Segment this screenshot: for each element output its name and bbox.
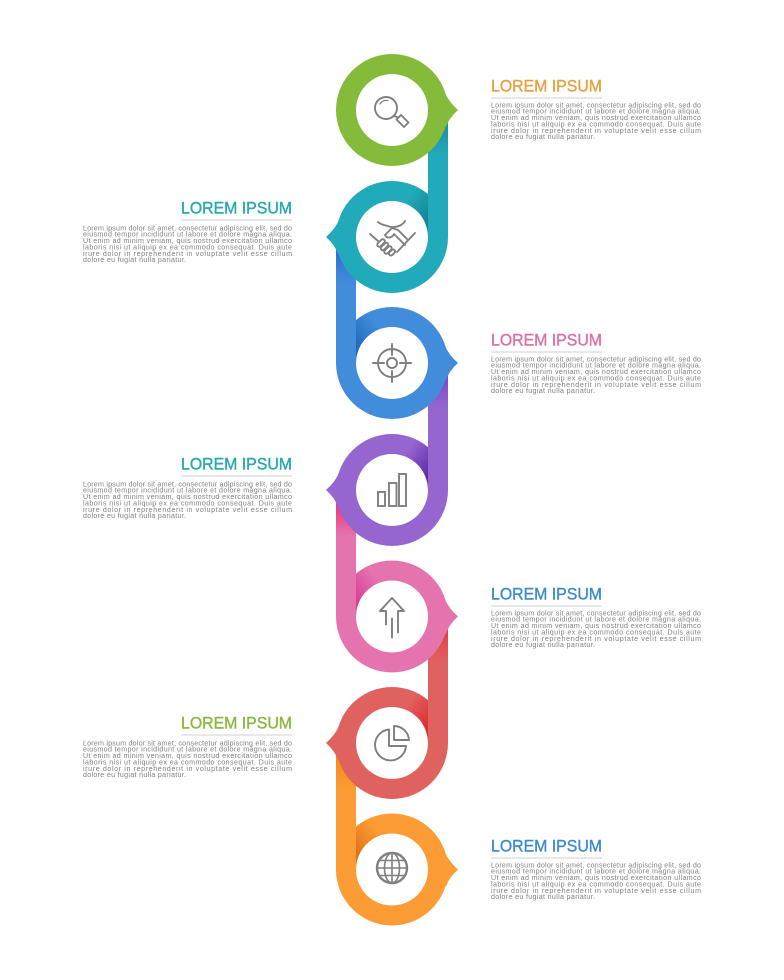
body text: eiusmod tempor incididunt ut labore et dolore magna aliqua.: [491, 616, 701, 624]
icon: magnifier: [375, 97, 408, 127]
orange ring shading: [356, 814, 388, 870]
body text: dolore eu fugiat nulla pariatur.: [83, 512, 186, 520]
body text: irure dolor in reprehenderit in voluptate velit esse cillum: [491, 887, 701, 895]
step 3: blue ring with target: [336, 245, 458, 419]
body text: laboris nisi ut aliquip ex ea commodo consequat. Duis aute: [491, 374, 701, 382]
body text: laboris nisi ut aliquip ex ea commodo consequat. Duis aute: [491, 628, 701, 636]
orange ring: [336, 814, 448, 926]
heading: LOREM IPSUM: [181, 198, 292, 217]
body text: Ut enim ad minim veniam, quis nostrud exercitation ullamco: [83, 237, 292, 245]
purple pointer: [326, 473, 347, 507]
body text: laboris nisi ut aliquip ex ea commodo consequat. Duis aute: [83, 499, 292, 507]
purple ring shading: [396, 434, 428, 490]
body text: Lorem ipsum dolor sit amet, consectetur adipiscing elit, sed do: [491, 355, 701, 363]
purple ring: [336, 434, 448, 546]
body text: irure dolor in reprehenderit in voluptate velit esse cillum: [83, 765, 292, 773]
body text: [83, 739, 292, 779]
text block: step 6: [83, 713, 292, 779]
step 6: red ring with pie chart: [326, 625, 448, 799]
text block: step 3: [491, 330, 701, 395]
step 4: purple ring with bar icon: [326, 372, 448, 546]
blue pointer: [437, 346, 458, 380]
body text: dolore eu fugiat nulla pariatur.: [83, 256, 186, 264]
icon: target: [373, 344, 411, 382]
body text: [83, 224, 292, 264]
body text: Lorem ipsum dolor sit amet, consectetur adipiscing elit, sed do: [83, 480, 292, 488]
teal connector: [428, 119, 448, 237]
heading: LOREM IPSUM: [181, 713, 292, 732]
body text: Ut enim ad minim veniam, quis nostrud exercitation ullamco: [491, 622, 701, 630]
teal ring: [336, 181, 448, 293]
blue ring shading: [356, 307, 388, 363]
step 2: teal ring with handshake: [326, 119, 448, 293]
pink pointer: [437, 600, 458, 634]
body text: [491, 101, 701, 141]
body text: eiusmod tempor incididunt ut labore et dolore magna aliqua.: [83, 487, 292, 495]
blue ring: [336, 307, 448, 419]
icon: up arrow: [380, 598, 404, 638]
body text: [491, 355, 701, 395]
body text: [491, 861, 701, 901]
body text: laboris nisi ut aliquip ex ea commodo consequat. Duis aute: [491, 120, 701, 128]
body text: laboris nisi ut aliquip ex ea commodo consequat. Duis aute: [83, 758, 292, 766]
body text: dolore eu fugiat nulla pariatur.: [83, 771, 186, 779]
icon: signal bars: [378, 474, 406, 506]
red ring shading: [396, 687, 428, 743]
body text: laboris nisi ut aliquip ex ea commodo consequat. Duis aute: [83, 243, 292, 251]
body text: irure dolor in reprehenderit in voluptate velit esse cillum: [491, 381, 701, 389]
body text: Ut enim ad minim veniam, quis nostrud exercitation ullamco: [491, 114, 701, 122]
body text: irure dolor in reprehenderit in voluptate velit esse cillum: [83, 250, 292, 258]
orange connector: [336, 752, 356, 870]
body text: irure dolor in reprehenderit in voluptate velit esse cillum: [491, 635, 701, 643]
body text: Lorem ipsum dolor sit amet, consectetur adipiscing elit, sed do: [491, 861, 701, 869]
red ring: [336, 687, 448, 799]
heading: LOREM IPSUM: [491, 330, 602, 349]
body text: eiusmod tempor incididunt ut labore et dolore magna aliqua.: [83, 746, 292, 754]
pink ring shading: [356, 561, 388, 616]
orange pointer: [437, 852, 458, 886]
green pointer: [437, 93, 458, 127]
body text: laboris nisi ut aliquip ex ea commodo consequat. Duis aute: [491, 880, 701, 888]
body text: Lorem ipsum dolor sit amet, consectetur adipiscing elit, sed do: [83, 224, 292, 232]
body text: Ut enim ad minim veniam, quis nostrud exercitation ullamco: [83, 752, 292, 760]
body text: Lorem ipsum dolor sit amet, consectetur adipiscing elit, sed do: [83, 739, 292, 747]
icon: pie chart: [375, 726, 409, 760]
body text: irure dolor in reprehenderit in voluptate velit esse cillum: [491, 127, 701, 135]
pink connector: [336, 498, 356, 616]
body text: eiusmod tempor incididunt ut labore et dolore magna aliqua.: [491, 868, 701, 876]
teal pointer: [326, 220, 347, 254]
body text: Ut enim ad minim veniam, quis nostrud exercitation ullamco: [491, 368, 701, 376]
step 5: pink ring with arrow: [336, 498, 458, 672]
purple connector: [428, 372, 448, 490]
pink ring: [336, 560, 448, 672]
text block: step 4: [83, 454, 292, 520]
teal ring shading: [396, 181, 428, 237]
body text: Lorem ipsum dolor sit amet, consectetur adipiscing elit, sed do: [491, 101, 701, 109]
body text: [83, 480, 292, 520]
body text: Lorem ipsum dolor sit amet, consectetur adipiscing elit, sed do: [491, 609, 701, 617]
icon: globe: [377, 853, 407, 883]
icon: handshake: [370, 221, 415, 256]
body text: irure dolor in reprehenderit in voluptate velit esse cillum: [83, 506, 292, 514]
body text: eiusmod tempor incididunt ut labore et dolore magna aliqua.: [83, 231, 292, 239]
heading: LOREM IPSUM: [491, 584, 602, 603]
heading: LOREM IPSUM: [491, 836, 602, 855]
text block: step 7: [491, 836, 701, 901]
step 7: orange ring with globe: [336, 752, 458, 926]
text block: step 5: [491, 584, 701, 649]
text block: step 2: [83, 198, 292, 264]
red connector: [428, 625, 448, 743]
body text: dolore eu fugiat nulla pariatur.: [491, 641, 595, 649]
heading: LOREM IPSUM: [181, 454, 292, 473]
body text: eiusmod tempor incididunt ut labore et dolore magna aliqua.: [491, 108, 701, 116]
body text: eiusmod tempor incididunt ut labore et dolore magna aliqua.: [491, 362, 701, 370]
red pointer: [326, 726, 347, 760]
step 1: green ring with magnifier: [336, 54, 458, 166]
green ring: [336, 54, 448, 166]
body text: dolore eu fugiat nulla pariatur.: [491, 133, 595, 141]
body text: Ut enim ad minim veniam, quis nostrud exercitation ullamco: [83, 493, 292, 501]
blue connector: [336, 245, 356, 363]
body text: dolore eu fugiat nulla pariatur.: [491, 387, 595, 395]
body text: [491, 609, 701, 649]
heading: LOREM IPSUM: [491, 76, 602, 95]
body text: Ut enim ad minim veniam, quis nostrud exercitation ullamco: [491, 874, 701, 882]
text block: step 1: [491, 76, 701, 141]
body text: dolore eu fugiat nulla pariatur.: [491, 893, 595, 901]
